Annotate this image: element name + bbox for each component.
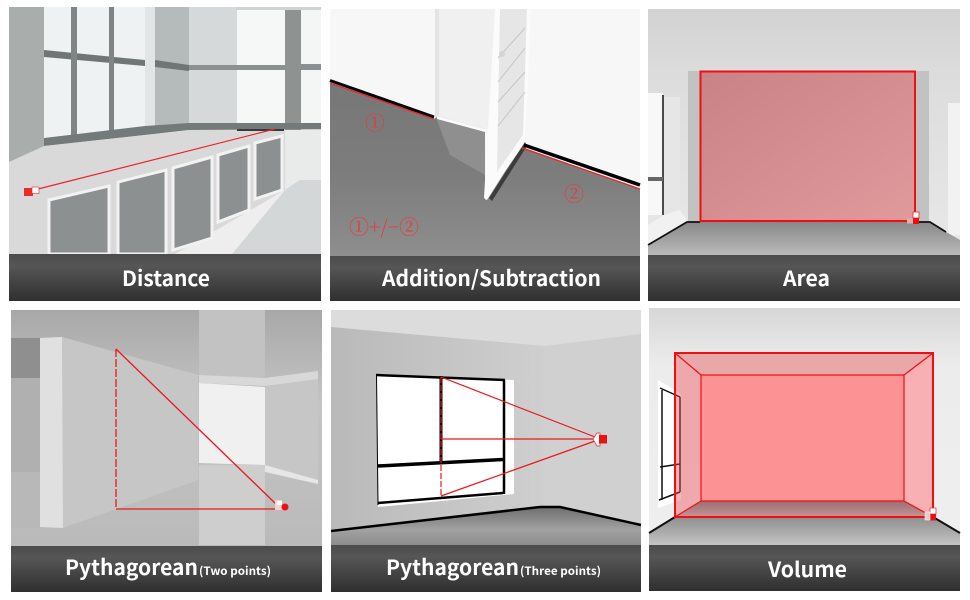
triangle: dashed height <box>115 349 117 509</box>
triangle: solid sides <box>116 349 277 509</box>
photo: empty room <box>649 308 960 545</box>
caption: Area: Area <box>782 263 830 293</box>
caption: Distance: Distance <box>122 263 210 293</box>
caption bar <box>9 254 321 301</box>
label: formula: ①+/−② <box>349 211 419 240</box>
caption bar <box>11 546 322 592</box>
caption: Pythagorean two points: (Two points) <box>199 563 271 579</box>
photo: room with window <box>331 310 641 545</box>
panel: volume <box>649 308 960 591</box>
laser lines <box>441 377 595 496</box>
panel: addition subtraction <box>330 9 640 301</box>
panel: pythagorean three points <box>331 310 641 592</box>
baseboard measure 1 <box>330 80 434 119</box>
laser line <box>38 129 275 189</box>
caption: Addition/Subtraction: Addition/Subtraction <box>381 263 601 293</box>
label: circled 2: ② <box>564 178 584 207</box>
panel: distance <box>9 7 321 301</box>
caption bar <box>330 256 640 301</box>
caption: Pythagorean three points: (Three points) <box>520 563 601 579</box>
photo: wall, door and floor <box>330 9 640 256</box>
icon: laser device <box>275 500 288 510</box>
photo: bay window room <box>9 7 321 254</box>
icon: laser device <box>925 508 936 520</box>
photo: interior with block <box>11 310 322 546</box>
baseboard measure 2 <box>522 145 640 189</box>
caption: Pythagorean three points: Pythagorean <box>386 552 519 582</box>
panel: pythagorean two points <box>11 310 322 592</box>
caption: Pythagorean two points: Pythagorean <box>65 552 198 582</box>
label: circled 1: ① <box>365 107 385 136</box>
caption: Pythagorean two points <box>65 552 271 582</box>
panel: area <box>648 9 960 301</box>
caption bar <box>648 255 960 301</box>
volume box <box>675 353 933 517</box>
caption bar <box>331 545 641 592</box>
caption: Volume: Volume <box>767 554 847 584</box>
icon: laser device <box>24 187 39 196</box>
icon: laser device <box>593 433 607 446</box>
caption: Pythagorean three points <box>386 552 601 582</box>
caption bar <box>649 545 960 591</box>
area rectangle <box>700 72 915 221</box>
icon: laser device <box>907 212 919 224</box>
photo: empty room <box>648 9 960 255</box>
